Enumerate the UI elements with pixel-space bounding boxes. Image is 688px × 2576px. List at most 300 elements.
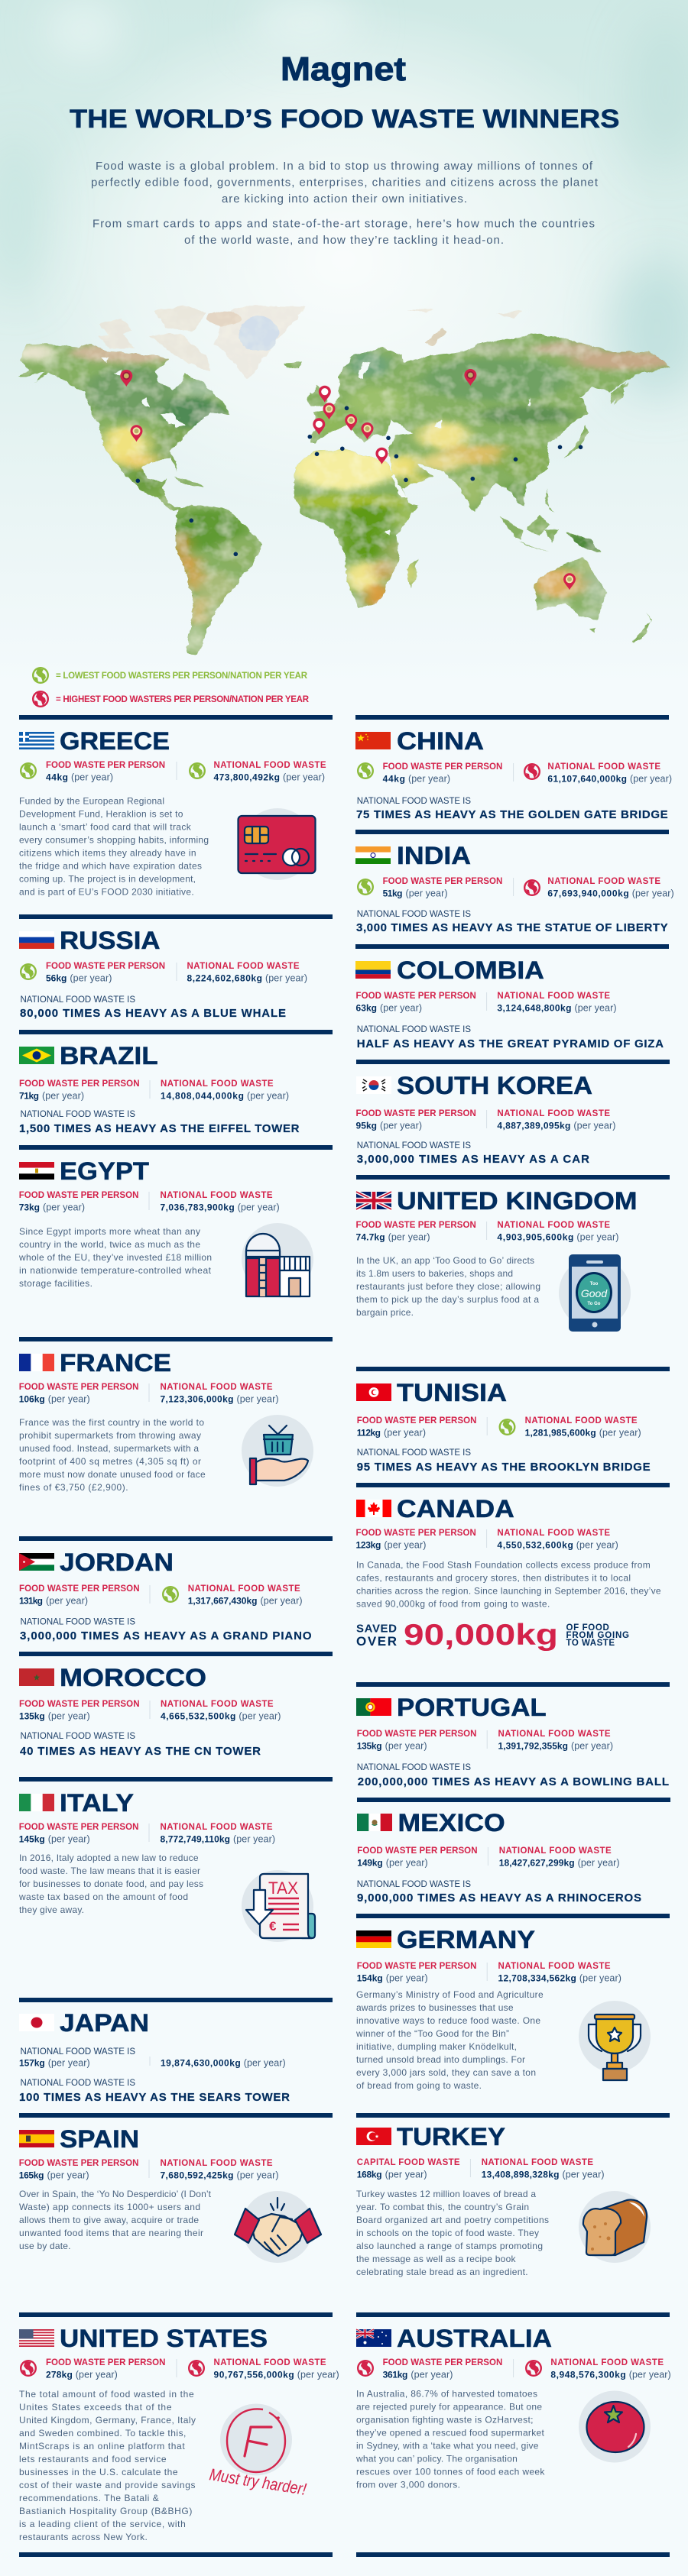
panel: Japan <box>19 1998 333 2104</box>
text block: In Canada, the Food Stash Foundation collects excess produce from <box>356 1560 651 1571</box>
title: SPAIN <box>60 2125 139 2153</box>
text block: celebrating stale bread as an ingredient. <box>356 2267 528 2277</box>
text block: Germany’s Ministry of Food and Agriculture <box>356 1989 544 2000</box>
panel: United States <box>19 2312 339 2542</box>
text block: Over in Spain, the ‘Yo No Desperdicio’ (I Don’t <box>19 2189 212 2199</box>
flag: Egypt <box>19 1162 54 1180</box>
stat: national: 8,224,602,680kg <box>187 973 262 984</box>
text block: Unites States exceeds that of the <box>19 2402 172 2413</box>
comparison: 3,000,000 TIMES AS HEAVY AS A CAR <box>357 1153 589 1166</box>
flag: Germany <box>356 1930 391 1948</box>
stat: national: (per year) <box>578 1858 620 1869</box>
stat: per person: FOOD WASTE PER PERSON <box>357 1730 476 1739</box>
text block: Board organized art and poetry competitions <box>356 2215 549 2225</box>
icon: trophy <box>579 2001 651 2080</box>
stat: per person: 106kg <box>19 1393 45 1404</box>
text block <box>355 1989 544 2091</box>
stat: per person: FOOD WASTE PER PERSON <box>19 1383 138 1392</box>
text block: Turkey wastes 12 million loaves of bread a <box>356 2189 536 2199</box>
text block: are rejected purely for appearance. But one <box>356 2402 542 2413</box>
stat: per person: (per year) <box>380 1002 422 1013</box>
stat: national <box>161 1383 278 1404</box>
stat: national: NATIONAL FOOD WASTE <box>482 2158 593 2167</box>
panel: South Korea <box>356 1060 670 1166</box>
intro text: perfectly edible food, governments, enterprises, charities and citizens across the planet <box>91 176 599 189</box>
intro text: of the world waste, and how they’re tackling it head-on. <box>184 234 504 247</box>
comparison <box>19 1110 300 1135</box>
text block: in nationwide temperature-controlled wheat <box>19 1265 212 1276</box>
title: JAPAN <box>60 2009 149 2037</box>
flag: Russia <box>19 931 54 949</box>
callout: saved over 90,000kg: OVER <box>356 1634 397 1649</box>
flag: South Korea <box>356 1076 391 1094</box>
flag: Jordan <box>19 1553 54 1571</box>
stat: per person: FOOD WASTE PER PERSON <box>383 762 502 772</box>
text block: more must now donate unused food or face <box>19 1469 206 1480</box>
title: CHINA <box>397 727 484 755</box>
flag: Greece <box>19 732 54 749</box>
stat: national: NATIONAL FOOD WASTE <box>161 1191 273 1200</box>
comparison <box>356 910 668 934</box>
stat: national: 4,903,905,600kg <box>497 1231 573 1242</box>
text block: every 3,000 jars sold, they can save a ton <box>356 2067 536 2078</box>
stat: per person: FOOD WASTE PER PERSON <box>383 2358 502 2367</box>
text block: Bastianich Hospitality Group (B&BHG) <box>19 2506 192 2516</box>
stat: per person: 51kg <box>383 888 402 898</box>
stat: national: 7,123,306,000kg <box>161 1393 234 1404</box>
stat: per person: (per year) <box>48 1711 90 1722</box>
stat: national <box>525 2358 671 2380</box>
stat: national <box>524 762 672 784</box>
text block: and is part of EU’s FOOD 2030 initiative. <box>19 886 194 897</box>
stat: national: NATIONAL FOOD WASTE <box>214 2358 326 2367</box>
stat: per person: (per year) <box>405 888 448 898</box>
stat: national: NATIONAL FOOD WASTE <box>525 1416 638 1426</box>
comparison: 40 TIMES AS HEAVY AS THE CN TOWER <box>20 1745 261 1758</box>
stat: national: 12,708,334,562kg <box>498 1972 576 1983</box>
panel: Mexico <box>357 1798 670 1904</box>
title: TURKEY <box>397 2123 505 2150</box>
title: COLOMBIA <box>397 956 544 984</box>
comparison: NATIONAL FOOD WASTE IS <box>20 1618 135 1627</box>
stat: national: (per year) <box>238 1202 280 1213</box>
legend: highest <box>32 691 310 707</box>
text block: organisation fighting waste is OzHarvest; <box>356 2414 534 2425</box>
stat: per person: (per year) <box>384 1427 426 1438</box>
stat: per person: 112kg <box>357 1427 381 1438</box>
stat: per person: 95kg <box>356 1120 377 1131</box>
text block: In Australia, 86.7% of harvested tomatoes <box>356 2388 537 2399</box>
stat: per person <box>356 1529 476 1551</box>
title: ITALY <box>60 1789 134 1817</box>
intro text: From smart cards to apps and state-of-the-art storage, here’s how much the countries <box>92 217 595 231</box>
stat: per person: 131kg <box>19 1595 43 1606</box>
panel: China <box>355 715 672 821</box>
stat: national <box>161 1079 289 1102</box>
stat: per person: FOOD WASTE PER PERSON <box>46 761 165 770</box>
icon: tomato <box>579 2391 651 2463</box>
text block: footprint of 400 sq metres (4,305 sq ft) or <box>19 1456 201 1467</box>
map dots <box>136 406 583 556</box>
text block: charities across the region. Since launching in September 2016, they’ve <box>356 1586 661 1597</box>
panel: Portugal <box>356 1682 670 1788</box>
panel: Greece <box>19 715 333 897</box>
text block: in Sydney, with a ‘take what you need, give <box>356 2440 539 2451</box>
stat: per person <box>357 2158 460 2180</box>
stat: national <box>188 2358 339 2380</box>
panel: Egypt <box>18 1145 333 1296</box>
stat: national: NATIONAL FOOD WASTE <box>497 1109 610 1118</box>
title: UNITED STATES <box>60 2325 268 2352</box>
icon: tax document <box>242 1870 315 1942</box>
stat: per person: FOOD WASTE PER PERSON <box>19 1191 138 1200</box>
stat: per person: (per year) <box>48 1393 90 1404</box>
stat: national <box>497 1109 615 1131</box>
stat: per person: FOOD WASTE PER PERSON <box>356 1109 476 1118</box>
comparison: NATIONAL FOOD WASTE IS <box>20 2079 135 2088</box>
stat: per person: FOOD WASTE PER PERSON <box>19 1700 139 1709</box>
stat: per person: FOOD WASTE PER PERSON <box>357 1962 476 1971</box>
stat: national: (per year) <box>260 1595 303 1606</box>
text block: what you can’ policy. The organisation <box>355 2454 518 2464</box>
callout: saved over 90,000kg: 90,000kg <box>404 1619 558 1652</box>
text block: for businesses to donate food, and pay less <box>19 1879 203 1889</box>
stat: national: (per year) <box>237 2170 278 2180</box>
stat: national <box>524 877 674 898</box>
stat: national: 7,036,783,900kg <box>161 1202 235 1213</box>
callout: saved over 90,000kg: TO WASTE <box>566 1639 615 1648</box>
flag: Colombia <box>355 961 391 979</box>
stat: per person: FOOD WASTE PER PERSON <box>356 1529 476 1538</box>
icon: smart card <box>239 808 315 880</box>
text block: initiative, dumpling maker Knödelkult, <box>356 2041 517 2052</box>
stat: national: (per year) <box>576 1540 618 1551</box>
stat: per person: (per year) <box>386 1972 428 1983</box>
title: BRAZIL <box>60 1042 158 1070</box>
stat: national: NATIONAL FOOD WASTE <box>161 2159 273 2168</box>
panel: Morocco <box>19 1664 281 1758</box>
text block <box>18 1226 212 1289</box>
stat: national: NATIONAL FOOD WASTE <box>498 1730 611 1739</box>
text block: cost of their waste and provide savings <box>19 2480 196 2490</box>
stat: national: 90,767,556,000kg <box>214 2370 294 2380</box>
stat: national: NATIONAL FOOD WASTE <box>499 1846 612 1856</box>
text block: recommendations. The Batali & <box>19 2493 159 2503</box>
text block: from over 3,000 donors. <box>356 2480 460 2490</box>
text block: United Kingdom, Germany, France, Italy <box>19 2415 196 2426</box>
title: TUNISIA <box>397 1379 507 1406</box>
stat: per person <box>19 1584 139 1606</box>
flag: Canada <box>356 1500 391 1517</box>
title: AUSTRALIA <box>397 2325 552 2352</box>
comparison: 95 TIMES AS HEAVY AS THE BROOKLYN BRIDGE <box>357 1461 651 1474</box>
stat: per person <box>19 2047 135 2069</box>
comparison <box>357 1025 664 1050</box>
panel: Tunisia <box>356 1367 670 1474</box>
stat: national: 19,874,630,000kg <box>161 2058 241 2069</box>
panel: France <box>19 1349 313 1493</box>
stat: national <box>161 2058 286 2069</box>
title: CANADA <box>397 1495 514 1523</box>
stat: national: (per year) <box>265 973 307 984</box>
stat: per person: (per year) <box>46 1595 88 1606</box>
icon: phone app: Too <box>590 1282 599 1286</box>
flag: Brazil <box>19 1047 54 1064</box>
text block: lets restaurants and food service <box>19 2454 167 2464</box>
world map <box>0 306 688 662</box>
comparison: NATIONAL FOOD WASTE IS <box>357 1141 471 1150</box>
stat: national: NATIONAL FOOD WASTE <box>161 1700 274 1709</box>
stat: national: NATIONAL FOOD WASTE <box>161 1079 274 1089</box>
comparison: NATIONAL FOOD WASTE IS <box>20 1732 135 1741</box>
stat: national: 1,281,985,600kg <box>525 1427 596 1438</box>
stat: per person: CAPITAL FOOD WASTE <box>357 2158 460 2167</box>
comparison <box>357 1141 589 1166</box>
intro text: Food waste is a global problem. In a bid to stop us throwing away millions of tonnes of <box>96 160 593 173</box>
text block: use by date. <box>19 2241 70 2251</box>
flag: United Kingdom <box>356 1192 391 1209</box>
stat: national: 1,317,667,430kg <box>188 1595 257 1606</box>
stat: per person: (per year) <box>408 773 450 784</box>
stat: national: (per year) <box>630 773 672 784</box>
stat: national: NATIONAL FOOD WASTE <box>497 1221 610 1230</box>
stat: per person: 71kg <box>19 1091 39 1102</box>
stat: national: NATIONAL FOOD WASTE <box>161 1823 273 1832</box>
text block: its 1.8m users to bakeries, shops and <box>356 1268 513 1279</box>
flag: United States <box>19 2329 54 2347</box>
text block: allows them to give away, acquire or trade <box>19 2215 199 2225</box>
stat: per person: 149kg <box>357 1858 383 1869</box>
stat: national: (per year) <box>632 888 674 898</box>
stat: per person: 278kg <box>46 2370 73 2380</box>
stat: national: 4,887,389,095kg <box>497 1120 570 1131</box>
text block: unwanted food items that are nearing their <box>19 2228 203 2238</box>
comparison: NATIONAL FOOD WASTE IS <box>357 797 471 806</box>
text block: the fridge and which have expiration dates <box>19 860 202 871</box>
stat: national: 7,680,592,425kg <box>161 2170 234 2180</box>
text block: in schools on the topic of food waste. They <box>356 2228 539 2238</box>
text block: launch a ‘smart’ food card that will track <box>19 822 192 833</box>
stat: per person <box>357 1730 476 1751</box>
legend: lowest: = LOWEST FOOD WASTERS PER PERSON/NATION PER YEAR <box>56 672 308 681</box>
text block: is a leading client of the service, with <box>19 2519 186 2529</box>
stat: per person <box>19 1383 138 1404</box>
text block: storage facilities. <box>19 1278 92 1289</box>
text block: restaurants just before they close; allowing <box>356 1281 540 1292</box>
icon: handshake <box>235 2191 321 2263</box>
text block: bargain price. <box>356 1307 414 1318</box>
comparison: NATIONAL FOOD WASTE IS <box>357 910 471 919</box>
stat: per person <box>20 2358 165 2380</box>
comparison <box>357 1448 651 1474</box>
panel: Germany <box>355 1914 670 2091</box>
title: MEXICO <box>398 1809 505 1837</box>
stat: national: 13,408,898,328kg <box>482 2170 560 2180</box>
stat: national: 18,427,627,299kg <box>499 1858 575 1869</box>
stat: per person <box>19 2159 138 2180</box>
stat: national: 1,391,792,355kg <box>498 1740 568 1751</box>
panel: Russia <box>19 914 333 1020</box>
stat: national: (per year) <box>247 1091 289 1102</box>
comparison <box>20 1732 261 1758</box>
text block: food waste. The law means that it is easier <box>19 1866 200 1876</box>
stat: national: (per year) <box>579 1972 621 1983</box>
stat: national: (per year) <box>563 2170 604 2180</box>
stat: national: 61,107,640,000kg <box>547 773 627 784</box>
icon: failing grade <box>208 2403 308 2499</box>
stat: per person <box>357 877 502 898</box>
stat: per person: 361kg <box>383 2370 407 2380</box>
stat: national <box>161 1823 275 1844</box>
text block: MintScraps is an online platform that <box>19 2441 185 2451</box>
intro text <box>91 160 599 247</box>
icon: phone app: To Go <box>588 1302 601 1306</box>
stat: per person: (per year) <box>411 2370 453 2380</box>
panel: Brazil <box>19 1030 333 1135</box>
title: GREECE <box>60 727 170 755</box>
stat: per person: FOOD WASTE PER PERSON <box>19 1584 139 1594</box>
callout: saved over 90,000kg: SAVED <box>356 1623 397 1636</box>
stat: national: NATIONAL FOOD WASTE <box>498 1962 611 1971</box>
panel: United Kingdom <box>356 1175 670 1332</box>
panel: Italy <box>18 1777 333 1942</box>
stat: per person: (per year) <box>384 1540 426 1551</box>
stat: per person: FOOD WASTE PER PERSON <box>19 1079 139 1089</box>
title: RUSSIA <box>60 927 161 954</box>
stat: per person: (per year) <box>76 2370 118 2380</box>
stat: national: (per year) <box>297 2370 339 2380</box>
text block <box>19 2389 196 2542</box>
stat: per person: (per year) <box>47 2170 89 2180</box>
stat: per person: 154kg <box>357 1972 383 1983</box>
icon: tax document: € <box>269 1919 277 1934</box>
stat: national: 14,808,044,000kg <box>161 1091 244 1102</box>
title: GERMANY <box>397 1926 535 1953</box>
stat: per person <box>357 762 502 784</box>
text block: country in the world, twice as much as the <box>19 1239 200 1250</box>
callout: saved over 90,000kg <box>356 1619 629 1652</box>
stat: national <box>161 1700 281 1722</box>
text block: rescues over 100 tonnes of food each week <box>356 2466 545 2477</box>
stat: per person: 44kg <box>383 773 405 784</box>
text block: fines of €3,750 (£2,900). <box>19 1482 128 1493</box>
stat: per person <box>357 1962 476 1983</box>
stat: per person <box>357 2358 502 2380</box>
stat: per person: FOOD WASTE PER PERSON <box>46 962 165 971</box>
stat: national <box>498 1416 641 1438</box>
title: INDIA <box>397 842 471 869</box>
text block: awards prizes to businesses that use <box>356 2002 514 2013</box>
text block: France was the first country in the world to <box>19 1417 204 1428</box>
comparison: HALF AS HEAVY AS THE GREAT PYRAMID OF GIZA <box>357 1037 664 1050</box>
panel: Australia <box>355 2312 671 2490</box>
comparison: 80,000 TIMES AS HEAVY AS A BLUE WHALE <box>20 1007 286 1020</box>
text block: winner of the “Too Good for the Bin” <box>355 2028 509 2039</box>
stat: per person <box>19 1823 138 1844</box>
stat: national: NATIONAL FOOD WASTE <box>187 962 300 971</box>
text block: citizens which items they already have in <box>19 848 196 859</box>
stat: national <box>162 1584 303 1606</box>
comparison: NATIONAL FOOD WASTE IS <box>357 1763 471 1772</box>
text block <box>356 1560 661 1609</box>
stat: per person: (per year) <box>71 772 113 782</box>
panel: India <box>355 830 674 934</box>
stat: national: NATIONAL FOOD WASTE <box>497 1529 610 1538</box>
text block: prohibit supermarkets from throwing away <box>19 1430 201 1441</box>
stat: national: (per year) <box>575 1002 616 1013</box>
stat: per person: (per year) <box>385 2170 427 2180</box>
stat: per person: 165kg <box>19 2170 44 2180</box>
flag: Mexico <box>357 1814 392 1831</box>
stat: per person: FOOD WASTE PER PERSON <box>356 1221 476 1230</box>
title: SOUTH KOREA <box>397 1072 592 1099</box>
comparison <box>357 1880 641 1904</box>
stat: per person: (per year) <box>385 1740 427 1751</box>
title: JORDAN <box>60 1549 174 1576</box>
stat: per person: 63kg <box>356 1002 377 1013</box>
stat: per person: 168kg <box>357 2170 382 2180</box>
comparison <box>19 2079 290 2104</box>
heading: the world's food waste winners: THE WORLD’S FOOD WASTE WINNERS <box>70 105 619 134</box>
stat: national: (per year) <box>239 1711 281 1722</box>
stat: per person: 135kg <box>19 1711 45 1722</box>
stat: national: NATIONAL FOOD WASTE <box>547 762 660 772</box>
comparison: 1,500 TIMES AS HEAVY AS THE EIFFEL TOWER <box>19 1122 300 1135</box>
stat: per person: FOOD WASTE PER PERSON <box>19 2159 138 2168</box>
stat: per person: (per year) <box>48 2058 90 2069</box>
stat: national: 473,800,492kg <box>214 772 280 782</box>
stat: per person: 73kg <box>19 1202 40 1213</box>
flag: Turkey <box>356 2128 391 2145</box>
stat: per person: FOOD WASTE PER PERSON <box>46 2358 165 2367</box>
panel: Canada <box>356 1483 670 1652</box>
text block: whole of the EU, they’ve invested £18 million <box>18 1252 212 1263</box>
stat: per person: 145kg <box>19 1833 45 1844</box>
stat: national <box>498 1730 613 1751</box>
icon: failing grade: Must try harder! <box>208 2464 308 2499</box>
text block: coming up. The project is in development, <box>19 874 196 885</box>
stat: national: NATIONAL FOOD WASTE <box>497 992 610 1001</box>
stat: national <box>161 2159 278 2180</box>
panel: Turkey <box>356 2113 670 2277</box>
stat: per person: FOOD WASTE PER PERSON <box>357 1416 476 1426</box>
stat: national: 4,665,532,500kg <box>161 1711 235 1722</box>
comparison: 3,000 TIMES AS HEAVY AS THE STATUE OF LIBERTY <box>356 921 668 934</box>
title: EGYPT <box>60 1157 149 1185</box>
stat: national <box>497 1529 618 1551</box>
text block: restaurants across New York. <box>19 2532 148 2542</box>
icon: phone app <box>559 1254 631 1332</box>
stat: national: NATIONAL FOOD WASTE <box>550 2358 664 2367</box>
text block <box>19 1417 206 1493</box>
text block: also launched a range of stamps promoting <box>356 2241 543 2251</box>
stat: per person: FOOD WASTE PER PERSON <box>19 1823 138 1832</box>
stat: per person: FOOD WASTE PER PERSON <box>383 877 502 886</box>
title: MOROCCO <box>60 1664 206 1691</box>
text block <box>19 2189 212 2251</box>
comparison: NATIONAL FOOD WASTE IS <box>357 1448 471 1458</box>
stat: per person <box>356 992 476 1013</box>
stat: per person <box>357 1846 477 1869</box>
callout: saved over 90,000kg: OF FOOD <box>566 1623 609 1633</box>
stat: national: NATIONAL FOOD WASTE <box>188 1584 300 1594</box>
stat: national <box>161 1191 280 1213</box>
stat: national: NATIONAL FOOD WASTE <box>161 1383 273 1392</box>
text block <box>18 1853 203 1915</box>
callout: saved over 90,000kg: FROM GOING <box>566 1631 629 1640</box>
stat: per person: 74.7kg <box>356 1231 385 1242</box>
stat: per person: (per year) <box>388 1231 430 1242</box>
